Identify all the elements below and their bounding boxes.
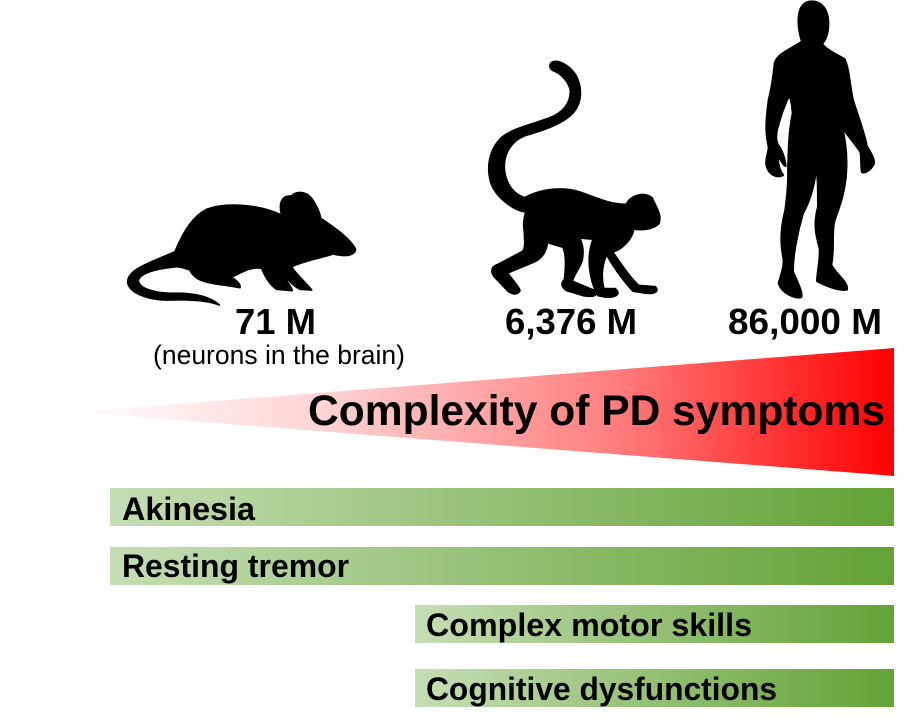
bar: Resting tremor: Resting tremor [122, 548, 349, 584]
label: human neuron count: 86,000 M [728, 301, 882, 342]
bar: Complex motor skills: Complex motor skills [426, 607, 752, 643]
bar: Cognitive dysfunctions [415, 669, 894, 707]
label: mouse neuron count: 71 M [235, 301, 316, 342]
bar: Akinesia [110, 488, 894, 527]
icon: monkey silhouette [489, 62, 659, 297]
bar: Cognitive dysfunctions: Cognitive dysfunctions [426, 671, 777, 707]
icon: human silhouette [766, 2, 874, 297]
bar: Complex motor skills [415, 605, 894, 643]
wedge: complexity of PD symptoms [75, 348, 894, 476]
caption: neurons in the brain: (neurons in the brain) [153, 340, 405, 370]
bar: Akinesia: Akinesia [122, 491, 255, 527]
icon: mouse silhouette [128, 192, 356, 305]
label: monkey neuron count: 6,376 M [505, 301, 637, 342]
bar: Resting tremor [110, 547, 894, 585]
wedge title: Complexity of PD symptoms [308, 387, 885, 435]
